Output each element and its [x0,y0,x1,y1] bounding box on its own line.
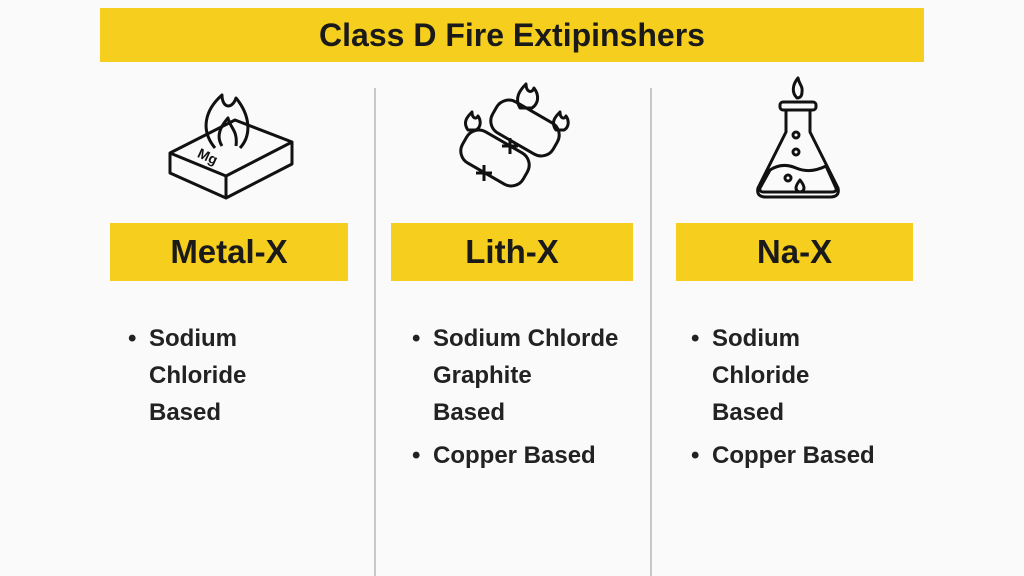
label: Na-X [676,223,913,281]
title [100,8,924,62]
label: Na-X: Na-X [757,233,832,270]
label: Lith-X [391,223,633,281]
icon: magnesium block on fire: Mg [195,145,220,168]
list: Metal-X [128,325,246,426]
list: Na-X: Chloride [712,362,809,389]
list: Lith-X: Graphite [433,362,532,389]
list: Metal-X: Based [149,399,221,426]
list: Lith-X: Copper Based [433,442,596,469]
label: Metal-X [110,223,348,281]
text: • [412,442,420,469]
label: Metal-X: Metal-X [170,233,288,270]
list: Na-X: Sodium [712,325,800,352]
text: • [691,325,699,352]
list: Na-X [691,325,875,469]
list: Lith-X [412,325,618,469]
text: • [128,325,136,352]
text: • [412,325,420,352]
list: Metal-X: Chloride [149,362,246,389]
title: Class D Fire Extipinshers [319,16,705,52]
list: Metal-X: Sodium [149,325,237,352]
icon: flask [756,76,840,198]
label: Lith-X: Lith-X [465,233,559,270]
icon: magnesium block on fire [168,93,294,200]
text: • [691,442,699,469]
list: Lith-X: Sodium Chlorde [433,325,618,352]
list: Na-X: Copper Based [712,442,875,469]
list: Lith-X: Based [433,399,505,426]
icon: batteries with flames [459,82,570,188]
list: Na-X: Based [712,399,784,426]
